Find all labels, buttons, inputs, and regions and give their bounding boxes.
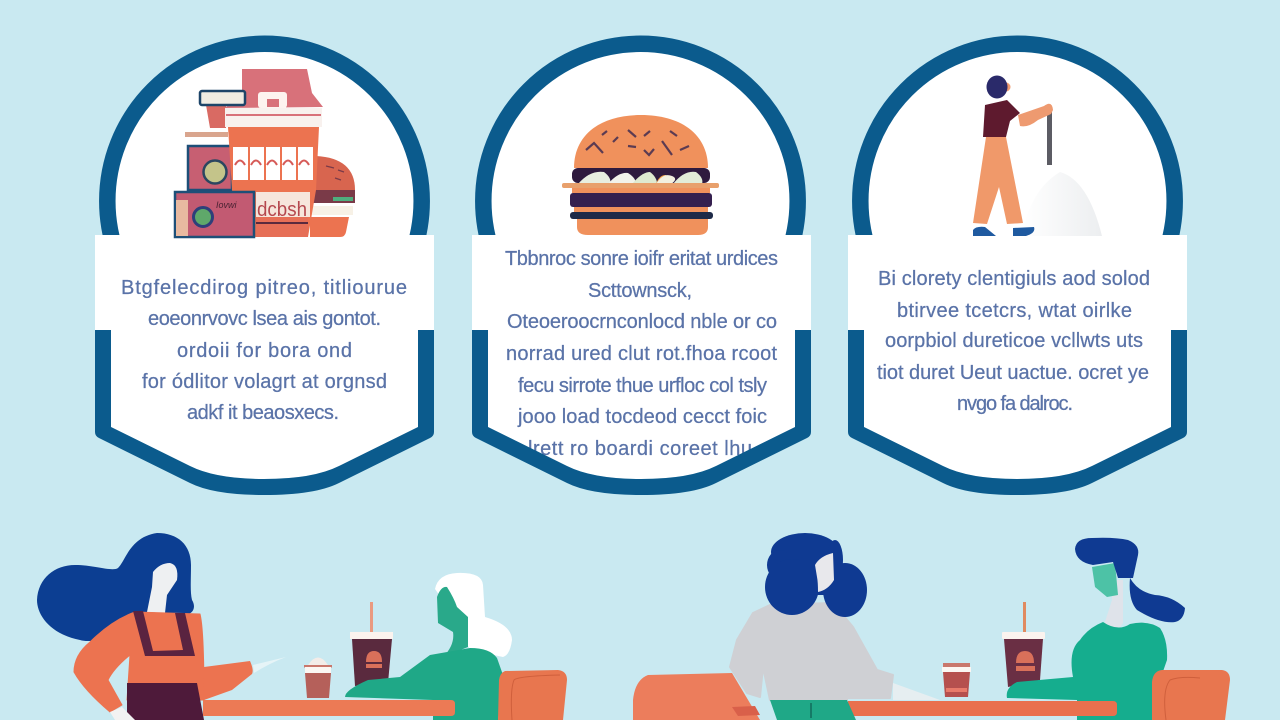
panel frame: arch — [483, 44, 798, 358]
panel frame: arch — [107, 44, 422, 358]
icon: packaging stack: Iovwi — [216, 200, 238, 210]
panel: burger — [472, 44, 811, 495]
text block: ordoii for bora ond — [177, 340, 352, 362]
text block: Tbbnroc sonre ioifr eritat urdices — [505, 248, 778, 270]
panel body: white band — [848, 235, 1187, 479]
scene: right table pair — [633, 533, 1230, 720]
panel body: white band — [472, 235, 811, 479]
text block: eoeonrvovc lsea ais gontot. — [148, 308, 381, 330]
chair — [1152, 670, 1230, 720]
text block — [505, 248, 778, 460]
text block — [121, 277, 407, 424]
figure: woman in grey sweater — [730, 533, 940, 720]
text block: btirvee tcetcrs, wtat oirlke — [897, 300, 1132, 322]
chair — [498, 670, 567, 720]
text block: jooo load tocdeod cecct foic — [517, 406, 767, 428]
figure: woman in overalls — [37, 533, 286, 720]
text block: lrett ro boardi coreet lhu — [528, 438, 752, 460]
icon: large soda cup — [350, 602, 393, 686]
panel frame: lower chevron — [472, 330, 811, 495]
panel frame: arch — [860, 44, 1175, 358]
text block: nvgo fa dalroc. — [957, 393, 1073, 415]
icon: person with pole — [973, 76, 1102, 236]
figure: teal woman with ponytail — [1007, 538, 1185, 720]
text block: tiot duret Ueut uactue. ocret ye — [877, 362, 1149, 384]
text block: fecu sirrote thue urfloc col tsly — [518, 375, 767, 397]
panel frame: lower chevron — [848, 330, 1187, 495]
text block: Bi clorety clentigiuls aod solod — [878, 268, 1150, 290]
icon: packaging stack — [175, 69, 355, 237]
text block: norrad ured clut rot.fhoa rcoot — [506, 343, 777, 365]
text block: for ódlitor volagrt at orgnsd — [142, 371, 387, 393]
scene: left table pair — [37, 533, 567, 720]
table — [203, 700, 455, 716]
chair — [633, 673, 760, 720]
text block — [877, 268, 1150, 415]
text block: adkf it beaosxecs. — [187, 402, 339, 424]
icon: burger — [562, 115, 719, 235]
text block: Oteoeroocrnconlocd nble or co — [507, 311, 777, 333]
text block: Btgfelecdirog pitreo, titliourue — [121, 277, 407, 299]
text block: oorpbiol dureticoe vcllwts uts — [885, 330, 1143, 352]
panel frame: lower chevron — [95, 330, 434, 495]
icon: small coffee cup — [304, 658, 332, 698]
icon: small coffee cup — [942, 663, 971, 697]
figure: teal woman with white hair — [345, 573, 512, 720]
icon: packaging stack: dcbsh — [257, 199, 307, 221]
panel: fast food packaging — [95, 44, 434, 495]
table — [848, 701, 1117, 716]
text block: Scttownsck, — [588, 280, 692, 302]
panel body: white band — [95, 235, 434, 479]
panel: person with pole — [848, 44, 1187, 495]
icon: large soda cup — [1002, 602, 1045, 687]
